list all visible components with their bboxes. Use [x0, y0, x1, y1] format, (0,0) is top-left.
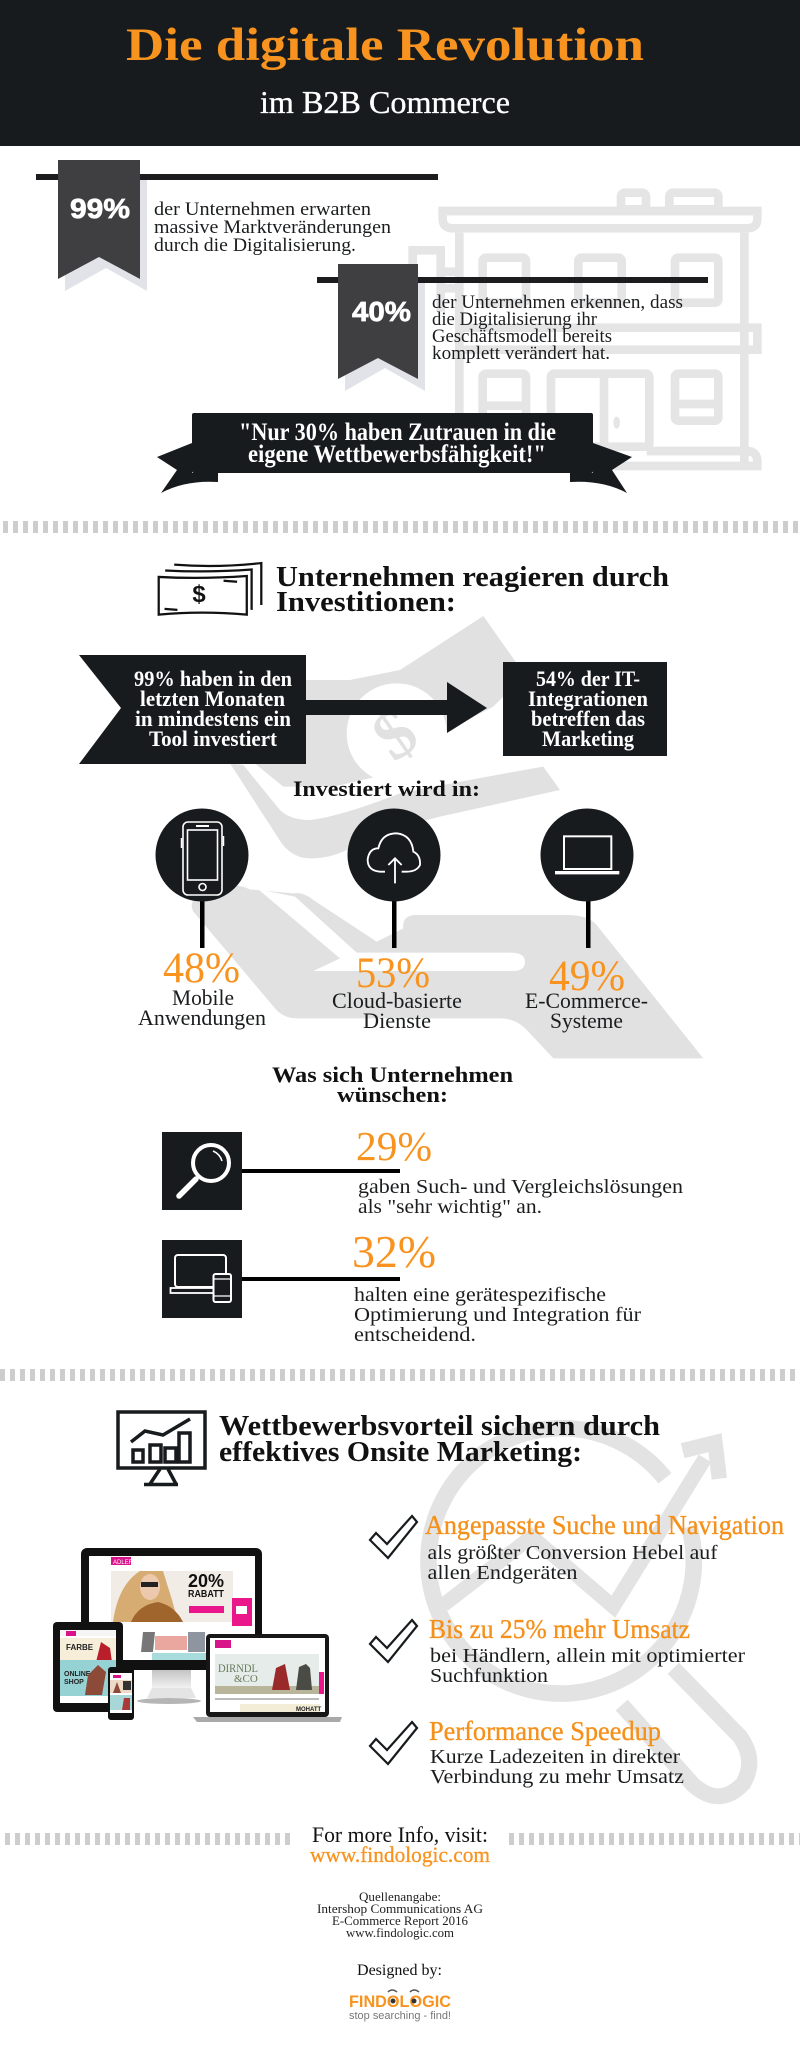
category: e-commerce — [525, 808, 648, 1033]
description: Optimierung und Integration für — [354, 1304, 641, 1326]
more info: For more Info, visit: — [312, 1822, 488, 1847]
value: 49% — [549, 953, 625, 1000]
ribbon shadow — [65, 180, 147, 291]
palm and fingers — [192, 885, 703, 1058]
designed by: Designed by: — [357, 1962, 442, 1979]
description: der Unternehmen erwarten — [154, 200, 371, 220]
benefit text: Kurze Ladezeiten in direkter — [430, 1746, 680, 1768]
watermark: building — [413, 193, 757, 467]
desktop monitor — [81, 1548, 262, 1704]
phone — [108, 1667, 134, 1720]
divider — [3, 521, 800, 533]
description: Geschäftsmodell bereits — [432, 327, 612, 347]
benefit text: als größter Conversion Hebel auf — [428, 1542, 718, 1564]
section heading: Onsite Marketing: effektives Onsite Marketing: — [219, 1437, 582, 1468]
wish: devices 32% — [162, 1226, 641, 1346]
laptop: &CO — [234, 1673, 258, 1685]
value: 48% — [163, 945, 240, 992]
left banner — [79, 655, 306, 764]
watermark: hand holding money — [187, 616, 703, 1058]
icon: smartphone — [182, 822, 224, 895]
right box text: Marketing — [542, 726, 634, 751]
benefit text: allen Endgeräten — [428, 1562, 578, 1584]
device mockups — [53, 1548, 342, 1722]
sources: Quellenangabe: — [359, 1890, 441, 1904]
left banner text: Tool investiert — [149, 726, 278, 751]
icon: check mark — [370, 1722, 417, 1764]
more info: www.findologic.com — [310, 1842, 490, 1867]
desktop monitor: 20% — [188, 1571, 224, 1591]
left banner text — [134, 666, 292, 751]
bill — [187, 616, 525, 787]
benefit: performance — [370, 1716, 684, 1788]
icon: devices — [162, 1240, 242, 1318]
benefit heading: Bis zu 25% mehr Umsatz — [429, 1614, 690, 1644]
description: komplett verändert hat. — [432, 344, 610, 364]
arrow — [300, 682, 487, 733]
description: entscheidend. — [354, 1324, 476, 1346]
rule — [317, 277, 708, 283]
sources: E-Commerce Report 2016 — [332, 1914, 468, 1928]
label — [332, 988, 462, 1033]
sources: Intershop Communications AG — [317, 1902, 483, 1916]
value: 29% — [356, 1123, 432, 1169]
ribbon — [58, 160, 140, 279]
icon: check mark — [370, 1620, 417, 1662]
icon: magnifier — [162, 1132, 242, 1210]
benefit: revenue — [370, 1614, 745, 1687]
heading text: Unternehmen reagieren durch — [276, 562, 669, 593]
right box — [503, 662, 667, 756]
icon: banknotes: $ — [192, 581, 206, 608]
flow: investment to IT integrations — [79, 655, 667, 764]
divider — [0, 1369, 800, 1381]
right box text — [528, 666, 648, 751]
value: 53% — [356, 950, 430, 997]
quote ribbon — [157, 413, 632, 493]
description: massive Marktveränderungen — [154, 218, 391, 238]
logo: Findologic — [349, 1990, 451, 2022]
icon: check mark — [370, 1516, 417, 1558]
label: Anwendungen — [138, 1005, 266, 1030]
section heading: Investitionen: Investitionen: — [276, 587, 456, 618]
description — [358, 1176, 683, 1218]
benefit text — [430, 1645, 745, 1687]
benefit text — [428, 1542, 718, 1584]
subheading: wishes: wünschen: — [337, 1082, 448, 1107]
description: als "sehr wichtig" an. — [358, 1196, 542, 1218]
watermark: magnifier with growth arrow — [428, 1428, 749, 1796]
desktop monitor: RABATT — [188, 1589, 224, 1600]
divider — [5, 1833, 291, 1845]
icon: laptop — [555, 836, 619, 873]
percentage: 40% — [352, 296, 411, 327]
ribbon — [338, 264, 418, 379]
laptop — [193, 1634, 342, 1722]
desktop monitor: ADLER — [113, 1560, 134, 1566]
benefit text — [430, 1746, 684, 1788]
category: mobile — [138, 808, 266, 1030]
benefit heading: Angepasste Suche und Navigation — [425, 1510, 784, 1540]
section heading: Onsite Marketing — [118, 1411, 660, 1484]
value: 32% — [352, 1226, 436, 1277]
label — [138, 985, 266, 1030]
subheading: Investiert wird in: Investiert wird in: — [293, 776, 480, 801]
right box text: 54% der IT- — [536, 666, 640, 691]
category: cloud — [332, 808, 462, 1033]
label: Mobile — [172, 985, 234, 1010]
section heading: Investitionen — [159, 562, 669, 618]
tablet: FARBE — [66, 1643, 94, 1652]
white coin — [347, 683, 447, 783]
benefit heading: Performance Speedup — [429, 1716, 661, 1746]
description — [154, 200, 391, 256]
quote text: "Nur 30% haben Zutrauen in die — [239, 419, 556, 446]
divider — [509, 1833, 800, 1845]
percentage: 99% — [70, 193, 130, 224]
wish: search 29% — [162, 1123, 683, 1218]
label: Cloud-basierte — [332, 988, 462, 1013]
rule — [36, 174, 438, 180]
description: die Digitalisierung ihr — [432, 310, 597, 330]
more info — [310, 1822, 490, 1867]
description: durch die Digitalisierung. — [154, 236, 356, 256]
dollar sign: $ — [359, 693, 432, 776]
description — [432, 293, 683, 364]
right box text: Integrationen — [528, 686, 648, 711]
tablet: ONLINE — [64, 1671, 91, 1678]
subheading: wishes: Was sich Unternehmen — [272, 1062, 513, 1087]
benefit text: bei Händlern, allein mit optimierter — [430, 1645, 745, 1667]
left banner text: 99% haben in den — [134, 666, 292, 691]
subheading: wishes — [272, 1062, 513, 1107]
description: der Unternehmen erkennen, dass — [432, 293, 683, 313]
logo: Findologic: stop searching - find! — [349, 2010, 451, 2022]
icon: chart monitor — [118, 1412, 205, 1484]
icon: cloud upload — [368, 833, 420, 883]
sources: www.findologic.com — [346, 1926, 454, 1940]
label: Systeme — [550, 1008, 623, 1033]
heading text: Wettbewerbsvorteil sichern durch — [219, 1411, 660, 1442]
sources — [317, 1890, 483, 1940]
gap between fingers — [258, 889, 525, 971]
subtitle: im B2B Commerce — [260, 84, 510, 120]
label — [525, 988, 648, 1033]
logo: Findologic: FINDOLOGIC — [349, 1992, 451, 2011]
label: E-Commerce- — [525, 988, 648, 1013]
statistic: 99% — [36, 160, 438, 291]
tablet — [53, 1622, 123, 1712]
ribbon shadow — [345, 283, 425, 391]
description — [354, 1284, 641, 1346]
band under bill — [230, 763, 560, 858]
description: gaben Such- und Vergleichslösungen — [358, 1176, 683, 1198]
icon: banknotes — [159, 563, 261, 615]
laptop: DIRNDL — [218, 1661, 258, 1675]
laptop: MOHATT — [296, 1707, 322, 1713]
description: halten eine gerätespezifische — [354, 1284, 606, 1306]
right box text: betreffen das — [531, 706, 645, 731]
benefit text: Suchfunktion — [430, 1665, 548, 1687]
left banner text: in mindestens ein — [135, 706, 291, 731]
title: Die digitale Revolution — [126, 19, 644, 71]
statistic: 40% — [317, 264, 708, 391]
tablet: SHOP — [64, 1679, 84, 1686]
benefit text: Verbindung zu mehr Umsatz — [430, 1766, 684, 1788]
benefit: search and navigation — [370, 1510, 784, 1584]
quote ribbon: eigene Wettbewerbsfähigkeit!" — [248, 441, 546, 468]
left banner text: letzten Monaten — [140, 686, 285, 711]
label: Dienste — [363, 1008, 431, 1033]
header banner — [0, 0, 800, 146]
